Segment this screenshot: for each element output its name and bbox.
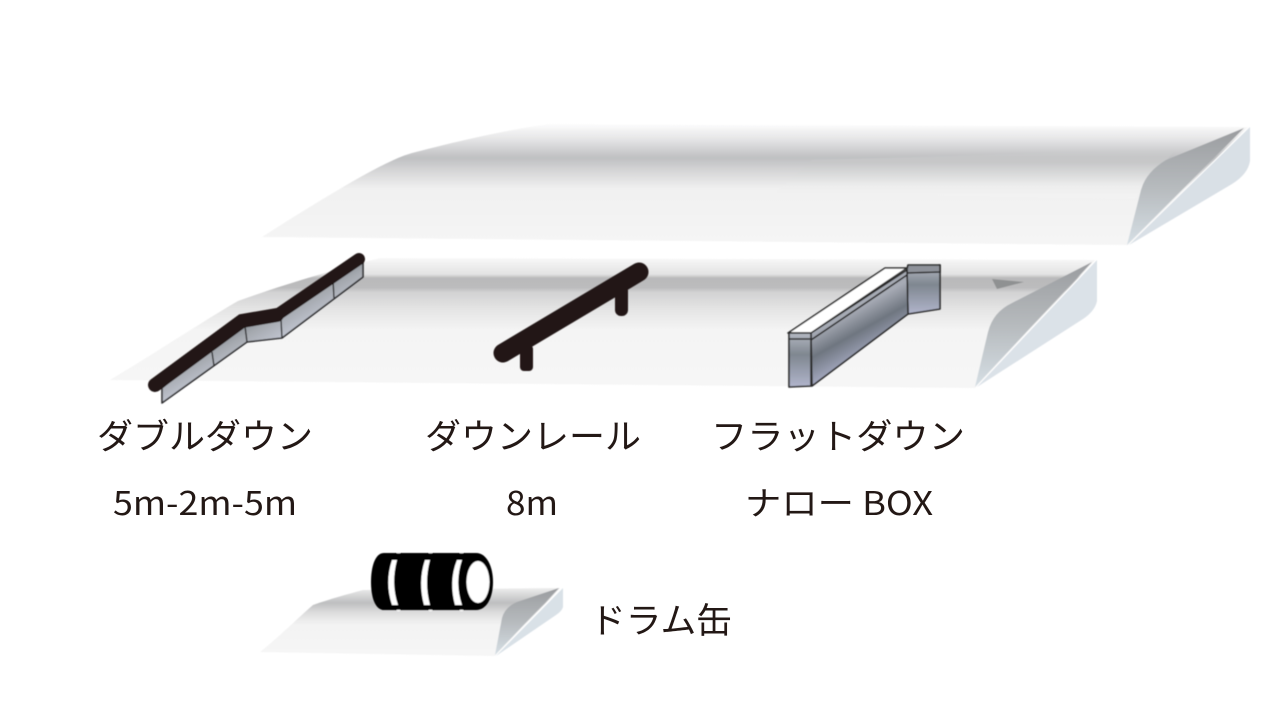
ramp: middle kicker bbox=[110, 258, 1097, 388]
label: double down: ダブルダウン bbox=[97, 409, 313, 460]
ramp: small kicker bbox=[260, 588, 563, 656]
label: down rail: ダウンレール bbox=[425, 409, 641, 460]
label: double down size: 5m-2m-5m bbox=[113, 477, 297, 525]
ramp: top large kicker bbox=[262, 124, 1250, 245]
icon: drum cans bbox=[371, 552, 493, 610]
label: flat down: フラットダウン bbox=[711, 409, 965, 460]
obstacle: double down rail bbox=[155, 259, 363, 403]
obstacle: flat down box bbox=[788, 265, 940, 387]
arrow mark bbox=[992, 279, 1024, 289]
label: narrow box: ナロー BOX bbox=[745, 477, 933, 525]
obstacle: down rail bbox=[503, 272, 639, 371]
label: drum can: ドラム缶 bbox=[590, 593, 732, 644]
label: down rail size: 8m bbox=[506, 477, 558, 525]
